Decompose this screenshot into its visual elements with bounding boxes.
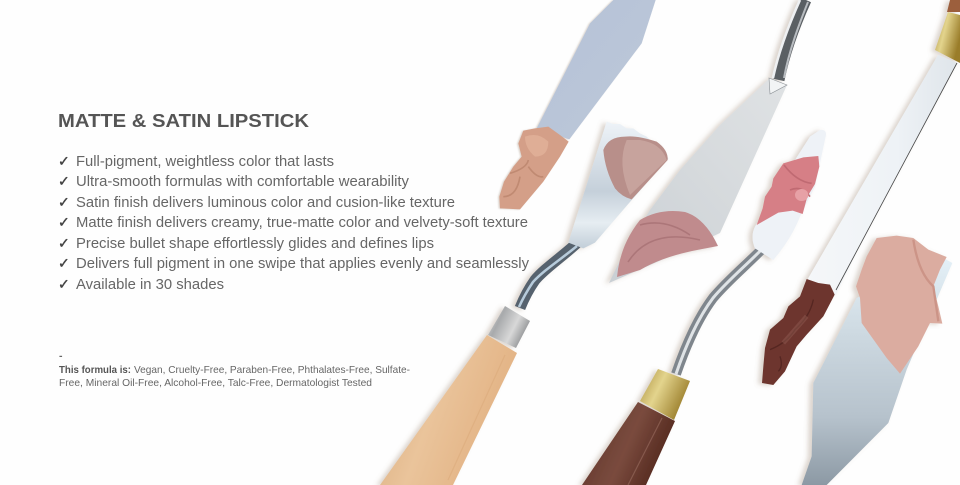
blade [609, 78, 787, 283]
formula line 2: Free, Mineral Oil-Free, Alcohol-Free, Talc-Free, Dermatologist Tested [59, 377, 372, 389]
swatch: nude lipstick [856, 236, 947, 374]
bullet 7: Available in 30 shades [76, 276, 224, 293]
swatch: peach lipstick [499, 127, 569, 209]
bullet 1: Full-pigment, weightless color that lasts [76, 153, 334, 170]
wood handle [380, 335, 517, 485]
bullet 7: ✓ [58, 277, 70, 293]
bullet 2: Ultra-smooth formulas with comfortable wearability [76, 173, 409, 190]
swatch: rose lipstick [617, 211, 718, 277]
tool: small knife with pink swatch and dark handle [582, 130, 826, 485]
swatch: pink lipstick [757, 156, 819, 225]
bullet 3: Satin finish delivers luminous color and cusion-like texture [76, 194, 455, 211]
swatch: mauve lipstick [603, 136, 668, 199]
feature list [58, 153, 529, 293]
blade [752, 130, 826, 260]
formula label: This formula is: [59, 364, 131, 376]
ferrule [640, 369, 690, 420]
bullet 1: ✓ [58, 154, 70, 170]
bullet 2: ✓ [58, 174, 70, 190]
formula line 1: Vegan, Cruelty-Free, Paraben-Free, Phthalates-Free, Sulfate- [134, 364, 410, 376]
ferrule [935, 12, 960, 63]
heel highlight [769, 78, 787, 94]
bullet 5: Precise bullet shape effortlessly glides and defines lips [76, 235, 434, 252]
tool: triangular knife with rose swatch [609, 0, 808, 283]
dark wood handle [582, 402, 675, 485]
upper blade [806, 55, 957, 295]
bullet 5: ✓ [58, 236, 70, 252]
dash: - [59, 350, 63, 362]
tool: long knife with brown and nude swatches [762, 0, 960, 485]
neck [519, 243, 577, 308]
tool: serrated knife with wood handle [380, 122, 668, 485]
wood handle stub [947, 0, 960, 12]
neck [676, 246, 765, 374]
bullet 4: ✓ [58, 215, 70, 231]
ferrule [488, 306, 530, 348]
bullet 6: ✓ [58, 256, 70, 272]
title: MATTE & SATIN LIPSTICK [58, 110, 310, 131]
neck [773, 0, 808, 80]
tool: top-left palette knife with peach swatch [499, 0, 656, 209]
lower blade [802, 258, 952, 485]
swatch: brown lipstick [762, 279, 835, 385]
bullet 6: Delivers full pigment in one swipe that applies evenly and seamlessly [76, 255, 529, 272]
blade edge [836, 63, 957, 290]
bullet 4: Matte finish delivers creamy, true-matte color and velvety-soft texture [76, 214, 528, 231]
blade [568, 122, 668, 248]
formula note [59, 350, 410, 389]
blade [537, 0, 656, 139]
bullet 3: ✓ [58, 195, 70, 211]
